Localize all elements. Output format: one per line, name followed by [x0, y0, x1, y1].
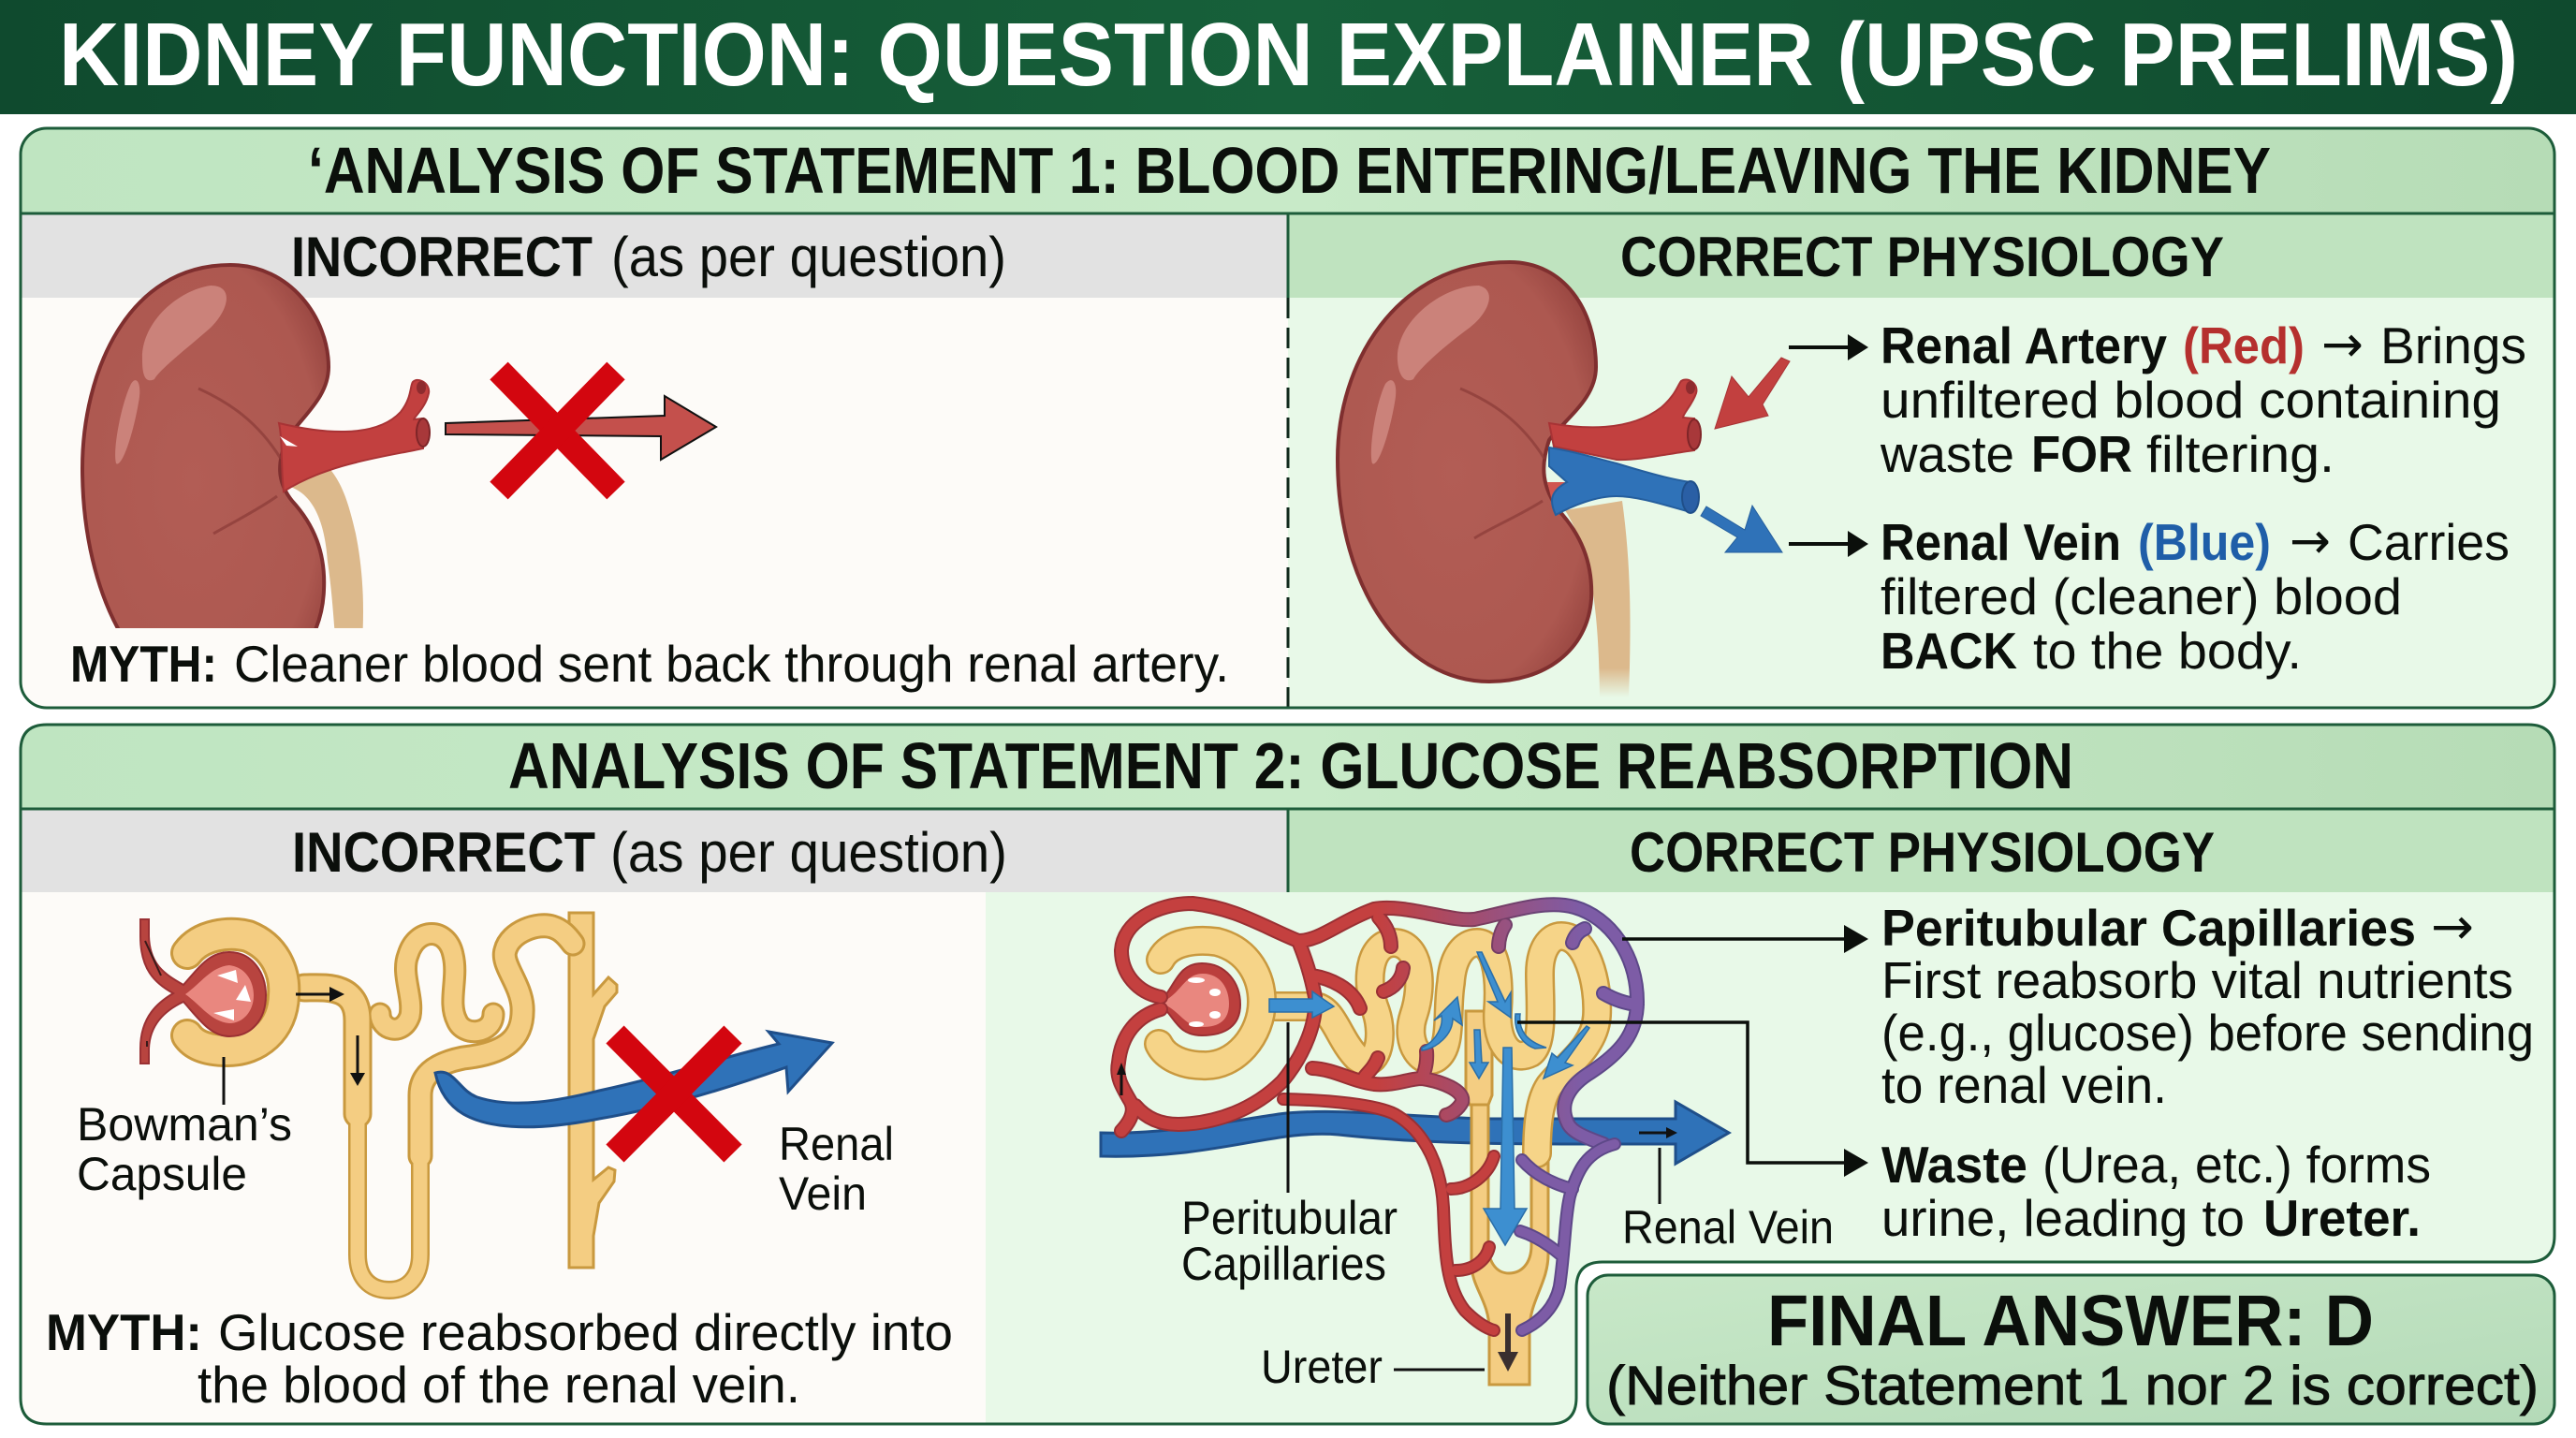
- myth text 2: the blood of the renal vein.: [198, 1356, 800, 1414]
- myth text 2: [46, 1303, 953, 1414]
- text: peritubular explanation: →: [2431, 897, 2474, 956]
- heading: statement 2: ANALYSIS OF STATEMENT 2: GLUCOSE REABSORPTION: [508, 729, 2073, 802]
- arrow: waste pointer: [1517, 1022, 1868, 1177]
- heading: incorrect 2: [292, 821, 1007, 884]
- icon: red cross 2: [615, 1034, 733, 1153]
- glomerulus: [1157, 963, 1240, 1035]
- convoluted tubule: [1159, 936, 1597, 1153]
- label: renal vein correct: Renal Vein: [1622, 1201, 1834, 1254]
- glomerulus and arterioles: [140, 919, 266, 1064]
- heading: incorrect 1: [291, 226, 1006, 288]
- panel: statement 1 analysis: [21, 128, 2554, 708]
- label: renal vein incorrect: Vein: [779, 1167, 867, 1220]
- text: waste explanation: urine, leading to: [1881, 1189, 2245, 1247]
- label: bowman's capsule: Bowman’s: [77, 1098, 292, 1151]
- text: renal artery explanation: unfiltered blood containing: [1881, 371, 2501, 429]
- flow arrows: [296, 987, 365, 1086]
- label: bowman's capsule: Capsule: [77, 1148, 247, 1200]
- text: renal vein explanation: (Blue): [2138, 513, 2271, 571]
- bowman's capsule: [187, 934, 284, 1050]
- text: peritubular explanation: to renal vein.: [1881, 1056, 2167, 1114]
- heading: incorrect 2: INCORRECT: [292, 821, 595, 884]
- bowman's tick: [223, 1057, 225, 1105]
- vein small arrow: [1639, 1127, 1677, 1138]
- text: waste explanation: [1881, 1136, 2431, 1247]
- text: renal artery explanation: [1880, 315, 2526, 483]
- text: renal artery explanation: Brings: [2380, 316, 2526, 374]
- panel: statement 2 analysis: [21, 725, 2554, 1424]
- label: renal vein incorrect: [779, 1118, 894, 1220]
- collecting duct: [569, 913, 617, 1268]
- text: renal vein explanation: Carries: [2348, 513, 2510, 571]
- text: renal artery explanation: waste: [1880, 425, 2014, 483]
- heading: correct physiology 1: CORRECT PHYSIOLOGY: [1620, 226, 2224, 288]
- text: renal artery explanation: →: [2321, 315, 2364, 374]
- heading: correct physiology 2: CORRECT PHYSIOLOGY: [1630, 821, 2215, 884]
- icon: kidney incorrect: [80, 263, 431, 628]
- myth text 1: MYTH:: [70, 635, 217, 693]
- text: waste explanation: Ureter.: [2263, 1189, 2421, 1247]
- ureter arrow: [1498, 1313, 1518, 1372]
- myth text 2: Glucose reabsorbed directly into: [218, 1303, 953, 1361]
- up arrow on vessel: [1117, 1063, 1126, 1095]
- heading: incorrect 1: (as per question): [611, 226, 1006, 288]
- text: peritubular explanation: First reabsorb vital nutrients: [1881, 951, 2513, 1009]
- callout: final answer: [1588, 1275, 2554, 1424]
- text: renal vein explanation: BACK: [1881, 622, 2017, 680]
- myth text 1: Cleaner blood sent back through renal artery.: [234, 635, 1229, 693]
- renal tubule: [304, 926, 573, 1290]
- arrow: peritubular pointer: [1622, 925, 1868, 953]
- arrow: label renal artery: [1789, 334, 1868, 360]
- renal vein: [1101, 1102, 1729, 1164]
- arrow: wrong reabsorption into vein: [435, 1032, 832, 1127]
- label: renal vein incorrect: Renal: [779, 1118, 894, 1170]
- blue flow arrows: [1269, 952, 1589, 1245]
- text: renal vein explanation: →: [2290, 511, 2331, 570]
- icon: kidney correct: [1338, 262, 1701, 697]
- diagram: nephron correct: [1101, 903, 1729, 1385]
- text: renal artery explanation: FOR: [2031, 425, 2132, 483]
- text: renal vein explanation: filtered (cleaner) blood: [1881, 567, 2402, 625]
- text: peritubular explanation: Peritubular Capillaries: [1881, 899, 2416, 957]
- text: renal artery explanation: filtering.: [2146, 425, 2334, 483]
- callout: final answer: FINAL ANSWER: D: [1767, 1281, 2374, 1361]
- label: peritubular capillaries: [1181, 1022, 1398, 1290]
- heading: incorrect 1: INCORRECT: [291, 226, 593, 288]
- text: waste explanation: (Urea, etc.) forms: [2042, 1136, 2431, 1194]
- arrow: wrong return flow: [446, 396, 716, 460]
- arrow: to renal artery: [1715, 358, 1790, 429]
- label: bowman's capsule: [77, 1098, 292, 1200]
- diagram: nephron incorrect: [140, 913, 617, 1290]
- heading: incorrect 2: (as per question): [610, 821, 1007, 884]
- text: waste explanation: Waste: [1881, 1136, 2027, 1194]
- label: peritubular capillaries: Capillaries: [1181, 1238, 1386, 1290]
- text: peritubular explanation: [1881, 897, 2534, 1114]
- heading: statement 1: ‘ANALYSIS OF STATEMENT 1: BLOOD ENTERING/LEAVING THE KIDNEY: [308, 134, 2271, 207]
- capillary network: [1118, 903, 1637, 1330]
- arrow: label renal vein: [1789, 531, 1868, 557]
- label: ureter: Ureter: [1261, 1341, 1383, 1393]
- tubule lower funnel: [1471, 1100, 1548, 1385]
- icon: red cross 1: [499, 371, 616, 491]
- thick descending limb: [1466, 1011, 1492, 1105]
- text: renal artery explanation: Renal Artery: [1881, 316, 2167, 374]
- text: renal vein explanation: [1881, 511, 2510, 680]
- text: renal vein explanation: to the body.: [2033, 622, 2302, 680]
- text: renal vein explanation: Renal Vein: [1881, 513, 2121, 571]
- myth text 2: MYTH:: [46, 1303, 202, 1361]
- text: peritubular explanation: (e.g., glucose) before sending: [1881, 1004, 2534, 1062]
- text: renal artery explanation: (Red): [2183, 316, 2305, 374]
- label: peritubular capillaries: Peritubular: [1181, 1192, 1398, 1244]
- arrow: from renal vein: [1701, 506, 1782, 552]
- callout: final answer: (Neither Statement 1 nor 2 is correct): [1606, 1356, 2539, 1416]
